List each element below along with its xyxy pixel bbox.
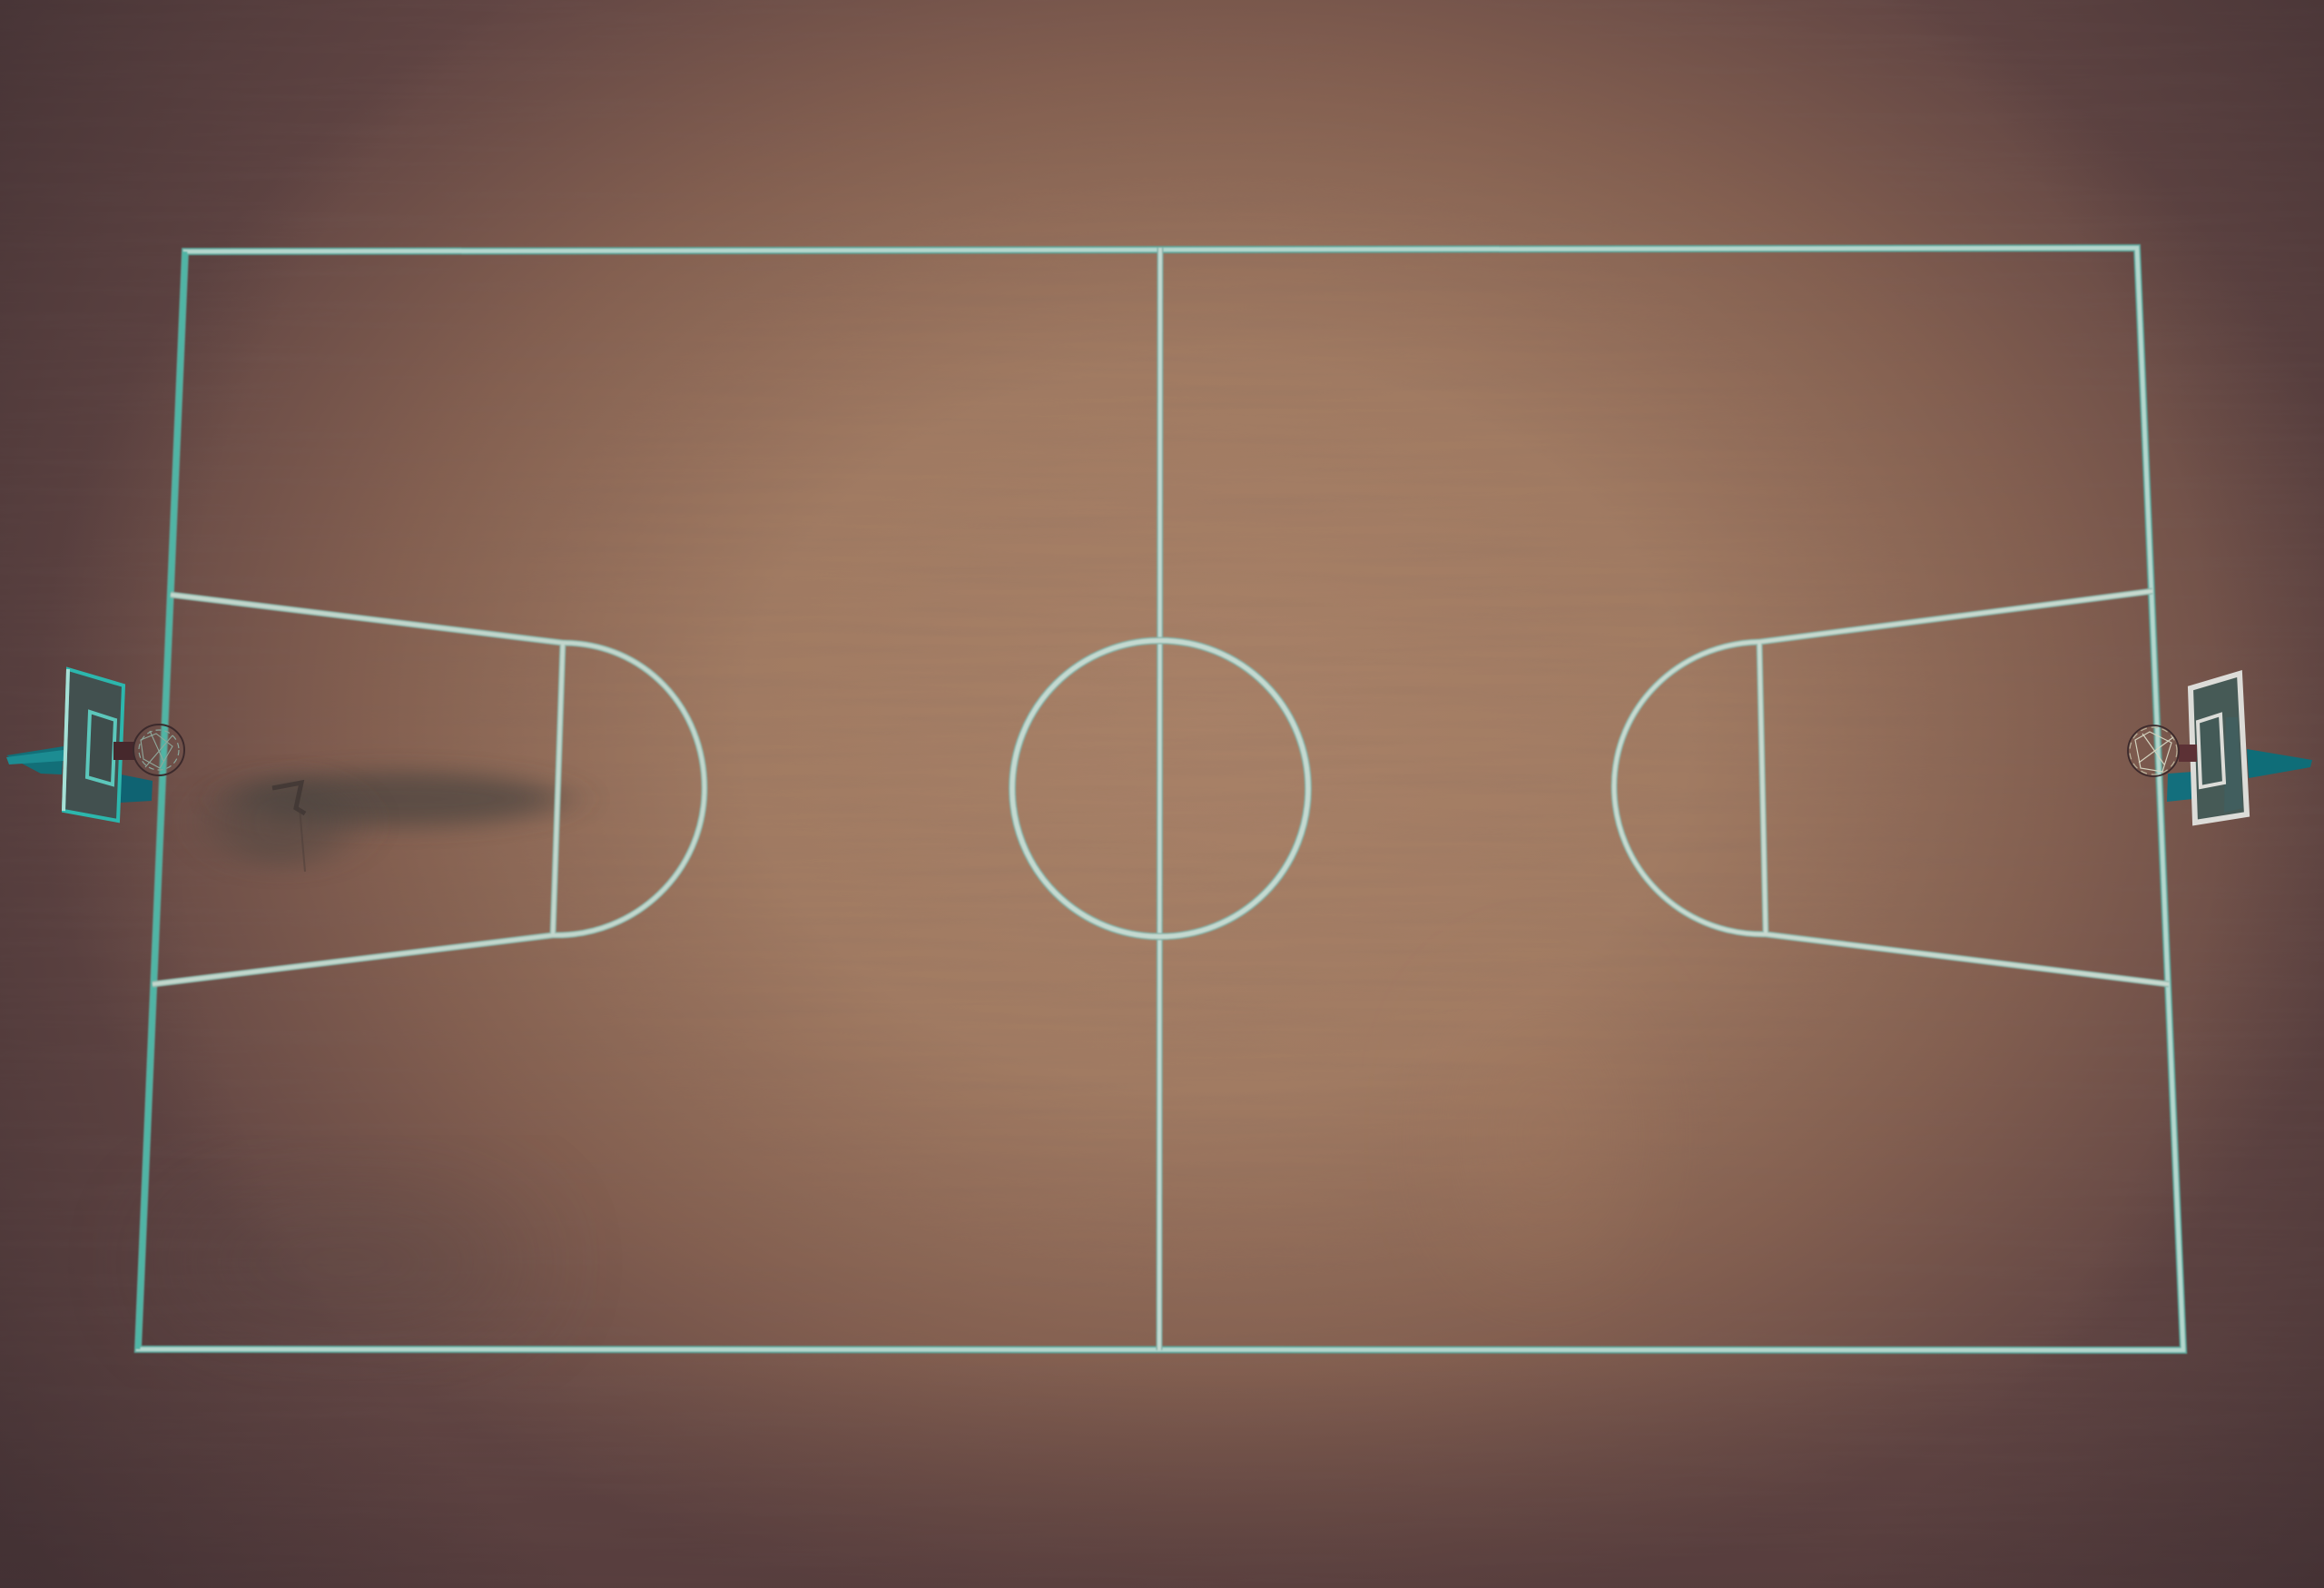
teal support wedge: [6, 746, 64, 774]
wear smudges: [163, 772, 1634, 1326]
right key: [1614, 591, 2169, 984]
rim bracket: [113, 742, 134, 760]
right hoop: [2128, 674, 2312, 823]
backboard: [64, 669, 123, 821]
court lines: [138, 248, 2183, 1350]
teal base: [120, 774, 153, 803]
backboard target square: [2198, 715, 2224, 787]
teal base: [2167, 772, 2192, 802]
center line: [1159, 248, 1160, 1350]
lower edge shading: [0, 1353, 2324, 1588]
left key: [153, 595, 704, 984]
backboard: [2191, 674, 2247, 823]
left hoop: [6, 669, 184, 821]
center circle: [1012, 641, 1308, 937]
rim bracket: [2179, 745, 2197, 762]
backboard target square: [87, 712, 115, 784]
rim and net: [133, 725, 184, 775]
rim and net: [2128, 725, 2179, 776]
teal support wedge: [2247, 749, 2312, 778]
court boundary: [138, 248, 2183, 1350]
